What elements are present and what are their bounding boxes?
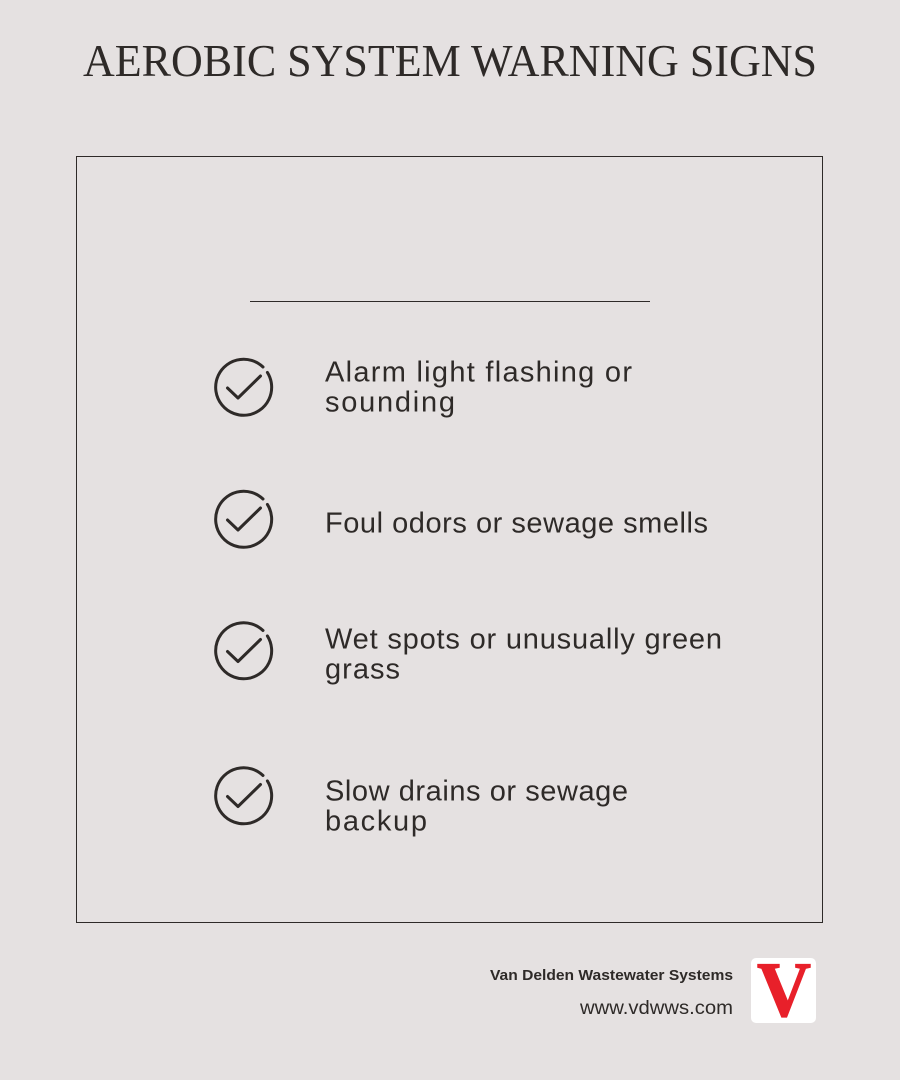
text: wet spots xyxy=(325,624,722,686)
icon: check circle xyxy=(216,623,272,679)
footer website: www.vdwws.com xyxy=(579,998,733,1019)
text: slow drains xyxy=(325,776,628,838)
text: alarm: sounding xyxy=(325,386,455,418)
icon: check circle xyxy=(216,768,272,824)
icon: check circle xyxy=(216,359,272,415)
text: wet spots: grass xyxy=(325,654,400,686)
panel: warning signs xyxy=(76,156,822,922)
item: odors xyxy=(216,491,708,547)
text: alarm xyxy=(325,356,632,418)
item: alarm xyxy=(216,356,632,418)
text: wet spots: Wet spots or unusually green xyxy=(325,624,722,656)
logo: V xyxy=(757,946,811,1033)
item: slow drains xyxy=(216,768,628,838)
footer company name: Van Delden Wastewater Systems xyxy=(490,968,733,984)
text: slow drains: backup xyxy=(325,806,427,838)
text: alarm: Alarm light flashing or xyxy=(325,356,632,388)
title: AEROBIC SYSTEM WARNING SIGNS xyxy=(83,35,817,86)
icon: check circle xyxy=(216,491,272,547)
item: wet spots xyxy=(216,623,722,686)
text: slow drains: Slow drains or sewage xyxy=(325,776,628,808)
text: odors: Foul odors or sewage smells xyxy=(325,508,708,540)
